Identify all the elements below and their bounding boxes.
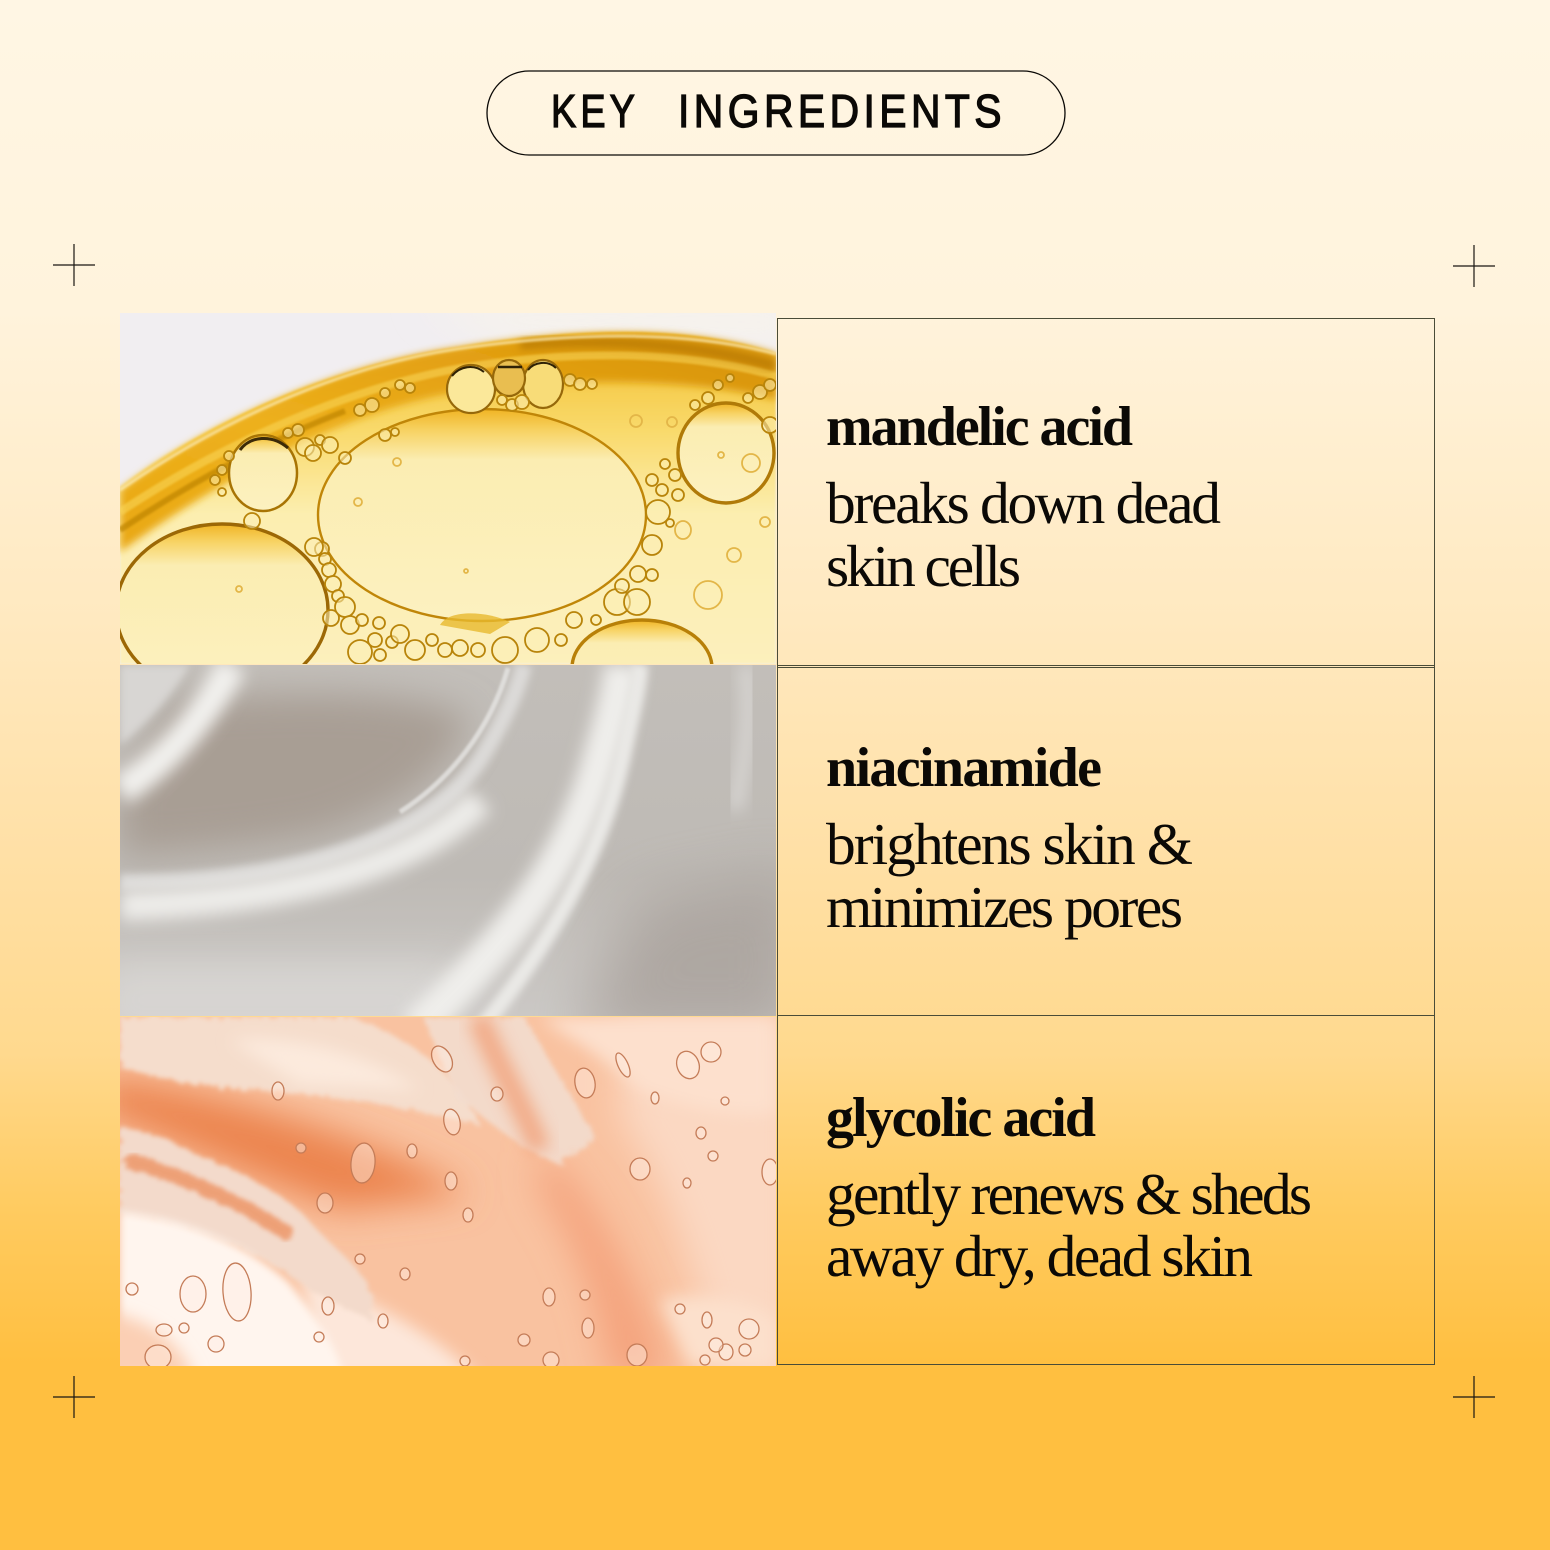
ingredient: mandelic acid: breaks down dead [826, 470, 1221, 536]
image: golden oil bubbles [120, 313, 776, 664]
title pill: INGREDIENTS [678, 85, 1006, 137]
ingredient: glycolic acid [826, 1087, 1312, 1289]
ingredient: niacinamide: brightens skin & [826, 811, 1193, 877]
foam clusters [210, 374, 778, 664]
top-left small bubble [229, 435, 297, 511]
title pill [487, 71, 1065, 155]
bottom-middle bubble [570, 618, 714, 664]
image: white cream swirl [120, 665, 776, 1016]
image: peach gel with droplets [120, 1017, 776, 1366]
ingredient table grid [777, 318, 1435, 1364]
ingredient: mandelic acid [826, 396, 1221, 599]
ingredient: niacinamide: niacinamide [826, 737, 1102, 799]
ingredient: niacinamide [826, 737, 1193, 940]
right bubble [678, 403, 774, 503]
ingredient: glycolic acid: gently renews & sheds [826, 1161, 1312, 1227]
bottom-left bubble [120, 522, 330, 664]
ingredient: mandelic acid: mandelic acid [826, 396, 1133, 458]
corner crosshair marks [53, 244, 1495, 1418]
top bubbles [447, 360, 563, 413]
ingredient: glycolic acid: away dry, dead skin [826, 1223, 1253, 1289]
ingredient: niacinamide: minimizes pores [826, 874, 1183, 940]
title pill: KEY [551, 85, 639, 137]
ingredient: glycolic acid: glycolic acid [826, 1087, 1096, 1149]
ingredient: mandelic acid: skin cells [826, 533, 1021, 599]
main bubble [318, 409, 646, 621]
